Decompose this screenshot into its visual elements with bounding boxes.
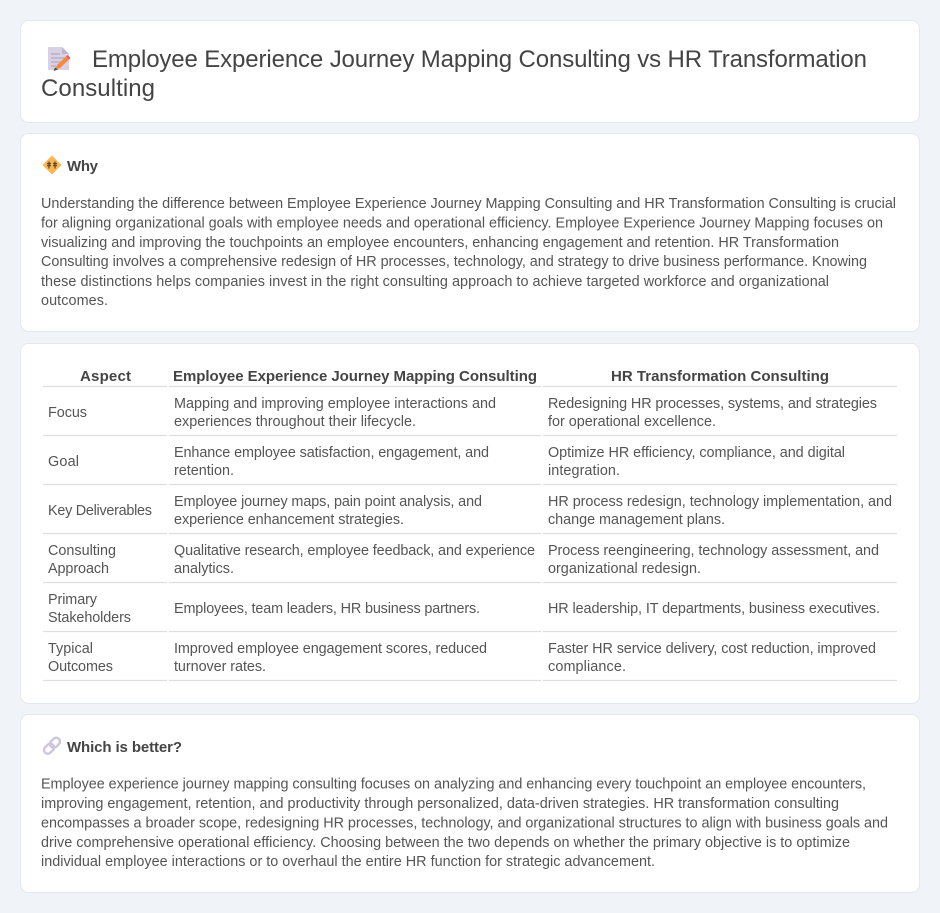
table header row: [43, 368, 897, 386]
why paragraph: visualizing and improving the touchpoints an employee encounters, enhancing engagement and retention. HR Transformation: [41, 235, 839, 251]
which is better paragraph: encompasses a broader scope, redesigning HR processes, technology, and organizational structures to align with business goals and: [41, 816, 888, 832]
row: typical outcomes: compliance.: [548, 659, 626, 675]
row: consulting approach: organizational redesign.: [548, 561, 701, 577]
table header row: HR Transformation Consulting: [611, 368, 829, 385]
row: goal: retention.: [174, 463, 234, 479]
row: key deliverables: experience enhancement strategies.: [174, 512, 404, 528]
table header row: Employee Experience Journey Mapping Consulting: [173, 368, 537, 385]
row: key deliverables: HR process redesign, technology implementation, and: [548, 494, 892, 510]
row: typical outcomes: turnover rates.: [174, 659, 266, 675]
title text: [41, 46, 867, 102]
row: consulting approach: Qualitative research, employee feedback, and experience: [174, 543, 535, 559]
which is better paragraph: improving engagement, retention, and productivity through personalized, data-driven strategies. HR transformation consulting: [41, 796, 839, 812]
row: focus: experiences throughout their lifecycle.: [174, 414, 416, 430]
which is better paragraph: [41, 776, 888, 870]
title text: Consulting: [41, 75, 155, 102]
why paragraph: for aligning organizational goals with employee needs and operational efficiency. Employee Experience Journey Mapping focuses on: [41, 216, 883, 232]
panel: which is better: [20, 714, 920, 892]
row: consulting approach: Approach: [48, 561, 109, 577]
row: typical outcomes: Improved employee engagement scores, reduced: [174, 641, 487, 657]
row: key deliverables: Key Deliverables: [48, 503, 152, 519]
panel: comparison table: [20, 344, 920, 704]
row: key deliverables: Employee journey maps, pain point analysis, and: [174, 494, 482, 510]
title text: Employee Experience Journey Mapping Consulting vs HR Transformation: [92, 46, 867, 73]
why paragraph: Understanding the difference between Employee Experience Journey Mapping Consulting and HR Transformation Consulting is crucial: [41, 196, 896, 212]
row: typical outcomes: Faster HR service delivery, cost reduction, improved: [548, 641, 876, 657]
why paragraph: [41, 196, 896, 309]
row: goal: integration.: [548, 463, 620, 479]
row: consulting approach: Consulting: [48, 543, 116, 559]
panel: title header: [20, 20, 920, 122]
heading: which is better: Which is better?: [67, 739, 182, 756]
row: goal: [43, 445, 897, 484]
row: primary stakeholders: Stakeholders: [48, 610, 131, 626]
row: consulting approach: Process reengineering, technology assessment, and: [548, 543, 879, 559]
row: goal: Enhance employee satisfaction, engagement, and: [174, 445, 489, 461]
why paragraph: these distinctions helps companies invest in the right consulting approach to achieve targeted workforce and organizational: [41, 274, 829, 290]
row: focus: for operational excellence.: [548, 414, 716, 430]
row: primary stakeholders: HR leadership, IT departments, business executives.: [548, 601, 880, 617]
row: consulting approach: [43, 543, 897, 582]
row: typical outcomes: Typical: [48, 641, 93, 657]
which is better paragraph: individual employee interactions or to overhaul the entire HR function for strategic advancement.: [41, 854, 655, 870]
panel: why: [20, 134, 920, 332]
row: primary stakeholders: Employees, team leaders, HR business partners.: [174, 601, 480, 617]
which is better paragraph: drive comprehensive operational efficiency. Choosing between the two depends on whether the primary objective is to optimize: [41, 835, 850, 851]
row: primary stakeholders: [43, 592, 897, 632]
icon: chain link: [42, 736, 62, 755]
why paragraph: Consulting involves a comprehensive redesign of HR processes, technology, and strategy to drive business performance. Knowing: [41, 254, 867, 270]
which is better paragraph: Employee experience journey mapping consulting focuses on analyzing and enhancing every touchpoint an employee encounters,: [41, 776, 866, 792]
row: typical outcomes: [43, 641, 897, 680]
row: typical outcomes: Outcomes: [48, 659, 113, 675]
icon: memo with pencil: [48, 47, 70, 71]
row: goal: Goal: [48, 454, 79, 470]
heading: why: Why: [67, 158, 99, 175]
row: goal: Optimize HR efficiency, compliance, and digital: [548, 445, 845, 461]
row: focus: Redesigning HR processes, systems, and strategies: [548, 396, 877, 412]
row: focus: Focus: [48, 405, 87, 421]
row: consulting approach: analytics.: [174, 561, 234, 577]
row: key deliverables: [43, 494, 897, 534]
row: focus: [43, 396, 897, 436]
row: key deliverables: change management plans.: [548, 512, 725, 528]
row: focus: Mapping and improving employee interactions and: [174, 396, 496, 412]
icon: orange diamond sign: [44, 156, 60, 174]
why paragraph: outcomes.: [41, 293, 108, 309]
row: primary stakeholders: Primary: [48, 592, 98, 608]
table header row: Aspect: [80, 368, 131, 385]
